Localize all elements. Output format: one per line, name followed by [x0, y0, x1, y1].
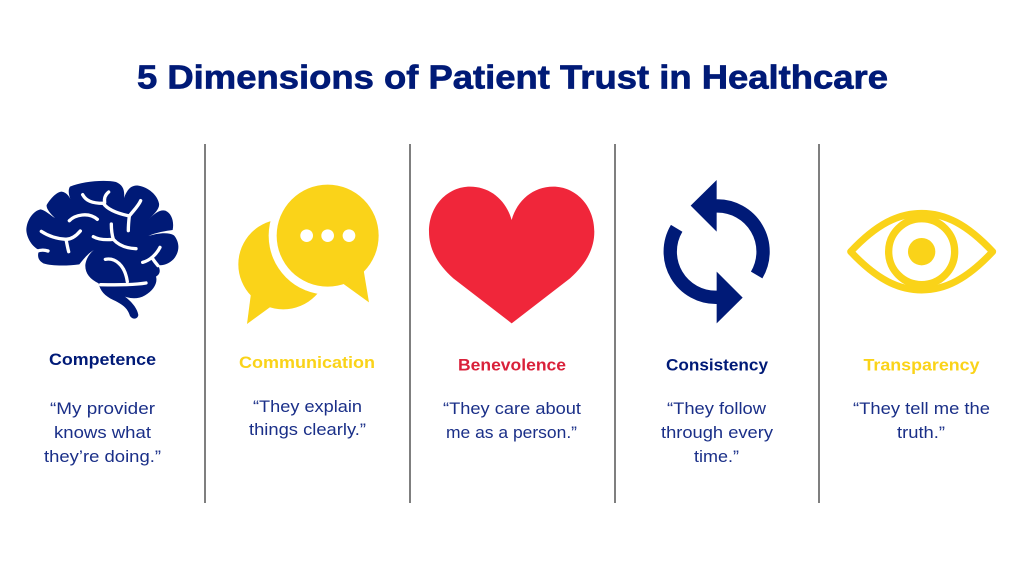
quote: consistency: “They follow: [667, 399, 767, 418]
quote: competence: [44, 399, 161, 466]
quote: transparency: [853, 399, 990, 442]
quote: transparency: “They tell me the: [853, 399, 990, 418]
icon: eye: [851, 213, 993, 290]
quote: consistency: [661, 399, 774, 466]
quote: competence: “My provider: [50, 399, 155, 418]
heading: competence: Competence: [49, 350, 156, 369]
quote: benevolence: “They care about: [443, 399, 581, 418]
quote: communication: things clearly.”: [249, 420, 366, 439]
heading: communication: Communication: [239, 353, 375, 372]
quote: competence: knows what: [54, 423, 151, 442]
quote: consistency: through every: [661, 423, 774, 442]
quote: benevolence: me as a person.”: [446, 423, 577, 442]
quote: consistency: time.”: [694, 447, 739, 466]
icon: circular arrows: [670, 180, 763, 323]
quote: transparency: truth.”: [897, 423, 945, 442]
icon: brain: [26, 181, 178, 319]
heading: consistency: Consistency: [666, 356, 769, 374]
panel: consistency: [661, 180, 774, 466]
icon: speech bubbles: [238, 177, 387, 324]
quote: benevolence: [443, 399, 581, 442]
quote: communication: [249, 397, 366, 439]
panel: transparency: [851, 213, 993, 442]
panel: communication: [238, 177, 387, 439]
title: 5 Dimensions of Patient Trust in Healthcare: [137, 58, 888, 96]
icon: heart: [429, 187, 594, 323]
panel: benevolence: [429, 187, 594, 442]
quote: communication: “They explain: [253, 397, 362, 416]
panel: competence: [26, 181, 178, 466]
heading: benevolence: Benevolence: [458, 356, 566, 374]
quote: competence: they’re doing.”: [44, 447, 161, 466]
heading: transparency: Transparency: [864, 356, 980, 374]
